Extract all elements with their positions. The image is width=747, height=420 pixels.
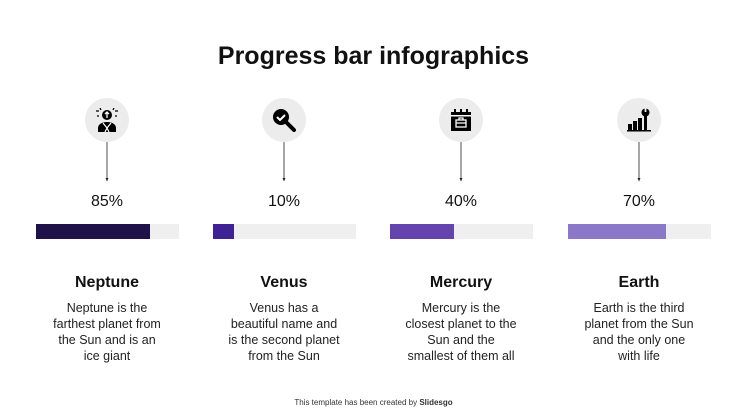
text: is the second planet xyxy=(228,333,340,347)
text: and the only one xyxy=(593,333,685,347)
text xyxy=(228,301,340,363)
heading: Venus xyxy=(260,274,308,291)
text xyxy=(584,301,694,363)
panel: Mercury xyxy=(390,98,533,363)
icon: magnifier check xyxy=(262,98,306,142)
panel: Venus xyxy=(213,98,356,363)
percentage: 70% xyxy=(623,193,655,210)
icon: idea person xyxy=(85,98,129,142)
arrow xyxy=(106,142,108,182)
footer: This template has been created by Slidesgo xyxy=(294,398,453,407)
heading: Earth xyxy=(619,274,659,291)
text: with life xyxy=(618,349,660,363)
text: farthest planet from xyxy=(53,317,161,331)
panel: Earth xyxy=(568,98,711,363)
title: Progress bar infographics xyxy=(218,42,529,70)
text: Earth is the third xyxy=(593,301,684,315)
panel: Neptune xyxy=(36,98,179,363)
text xyxy=(53,301,161,363)
text: Sun and the xyxy=(427,333,495,347)
text: ice giant xyxy=(84,349,130,363)
text: planet from the Sun xyxy=(584,317,694,331)
progress bar xyxy=(568,224,711,239)
progress bar xyxy=(36,224,179,239)
text: Venus has a xyxy=(250,301,318,315)
icon: chart wrench xyxy=(617,98,661,142)
text: Neptune is the xyxy=(67,301,147,315)
text: from the Sun xyxy=(248,349,320,363)
text: beautiful name and xyxy=(231,317,337,331)
text: Mercury is the xyxy=(422,301,500,315)
heading: Mercury xyxy=(430,274,492,291)
percentage: 10% xyxy=(268,193,300,210)
progress bar xyxy=(390,224,533,239)
text xyxy=(405,301,517,363)
percentage: 40% xyxy=(445,193,477,210)
arrow xyxy=(638,142,640,182)
text: closest planet to the xyxy=(405,317,517,331)
heading: Neptune xyxy=(75,274,139,291)
icon: calendar briefcase xyxy=(439,98,483,142)
arrow xyxy=(460,142,462,182)
text: the Sun and is an xyxy=(58,333,156,347)
percentage: 85% xyxy=(91,193,123,210)
arrow xyxy=(282,142,286,182)
text: smallest of them all xyxy=(408,349,514,363)
progress bar xyxy=(213,224,356,239)
